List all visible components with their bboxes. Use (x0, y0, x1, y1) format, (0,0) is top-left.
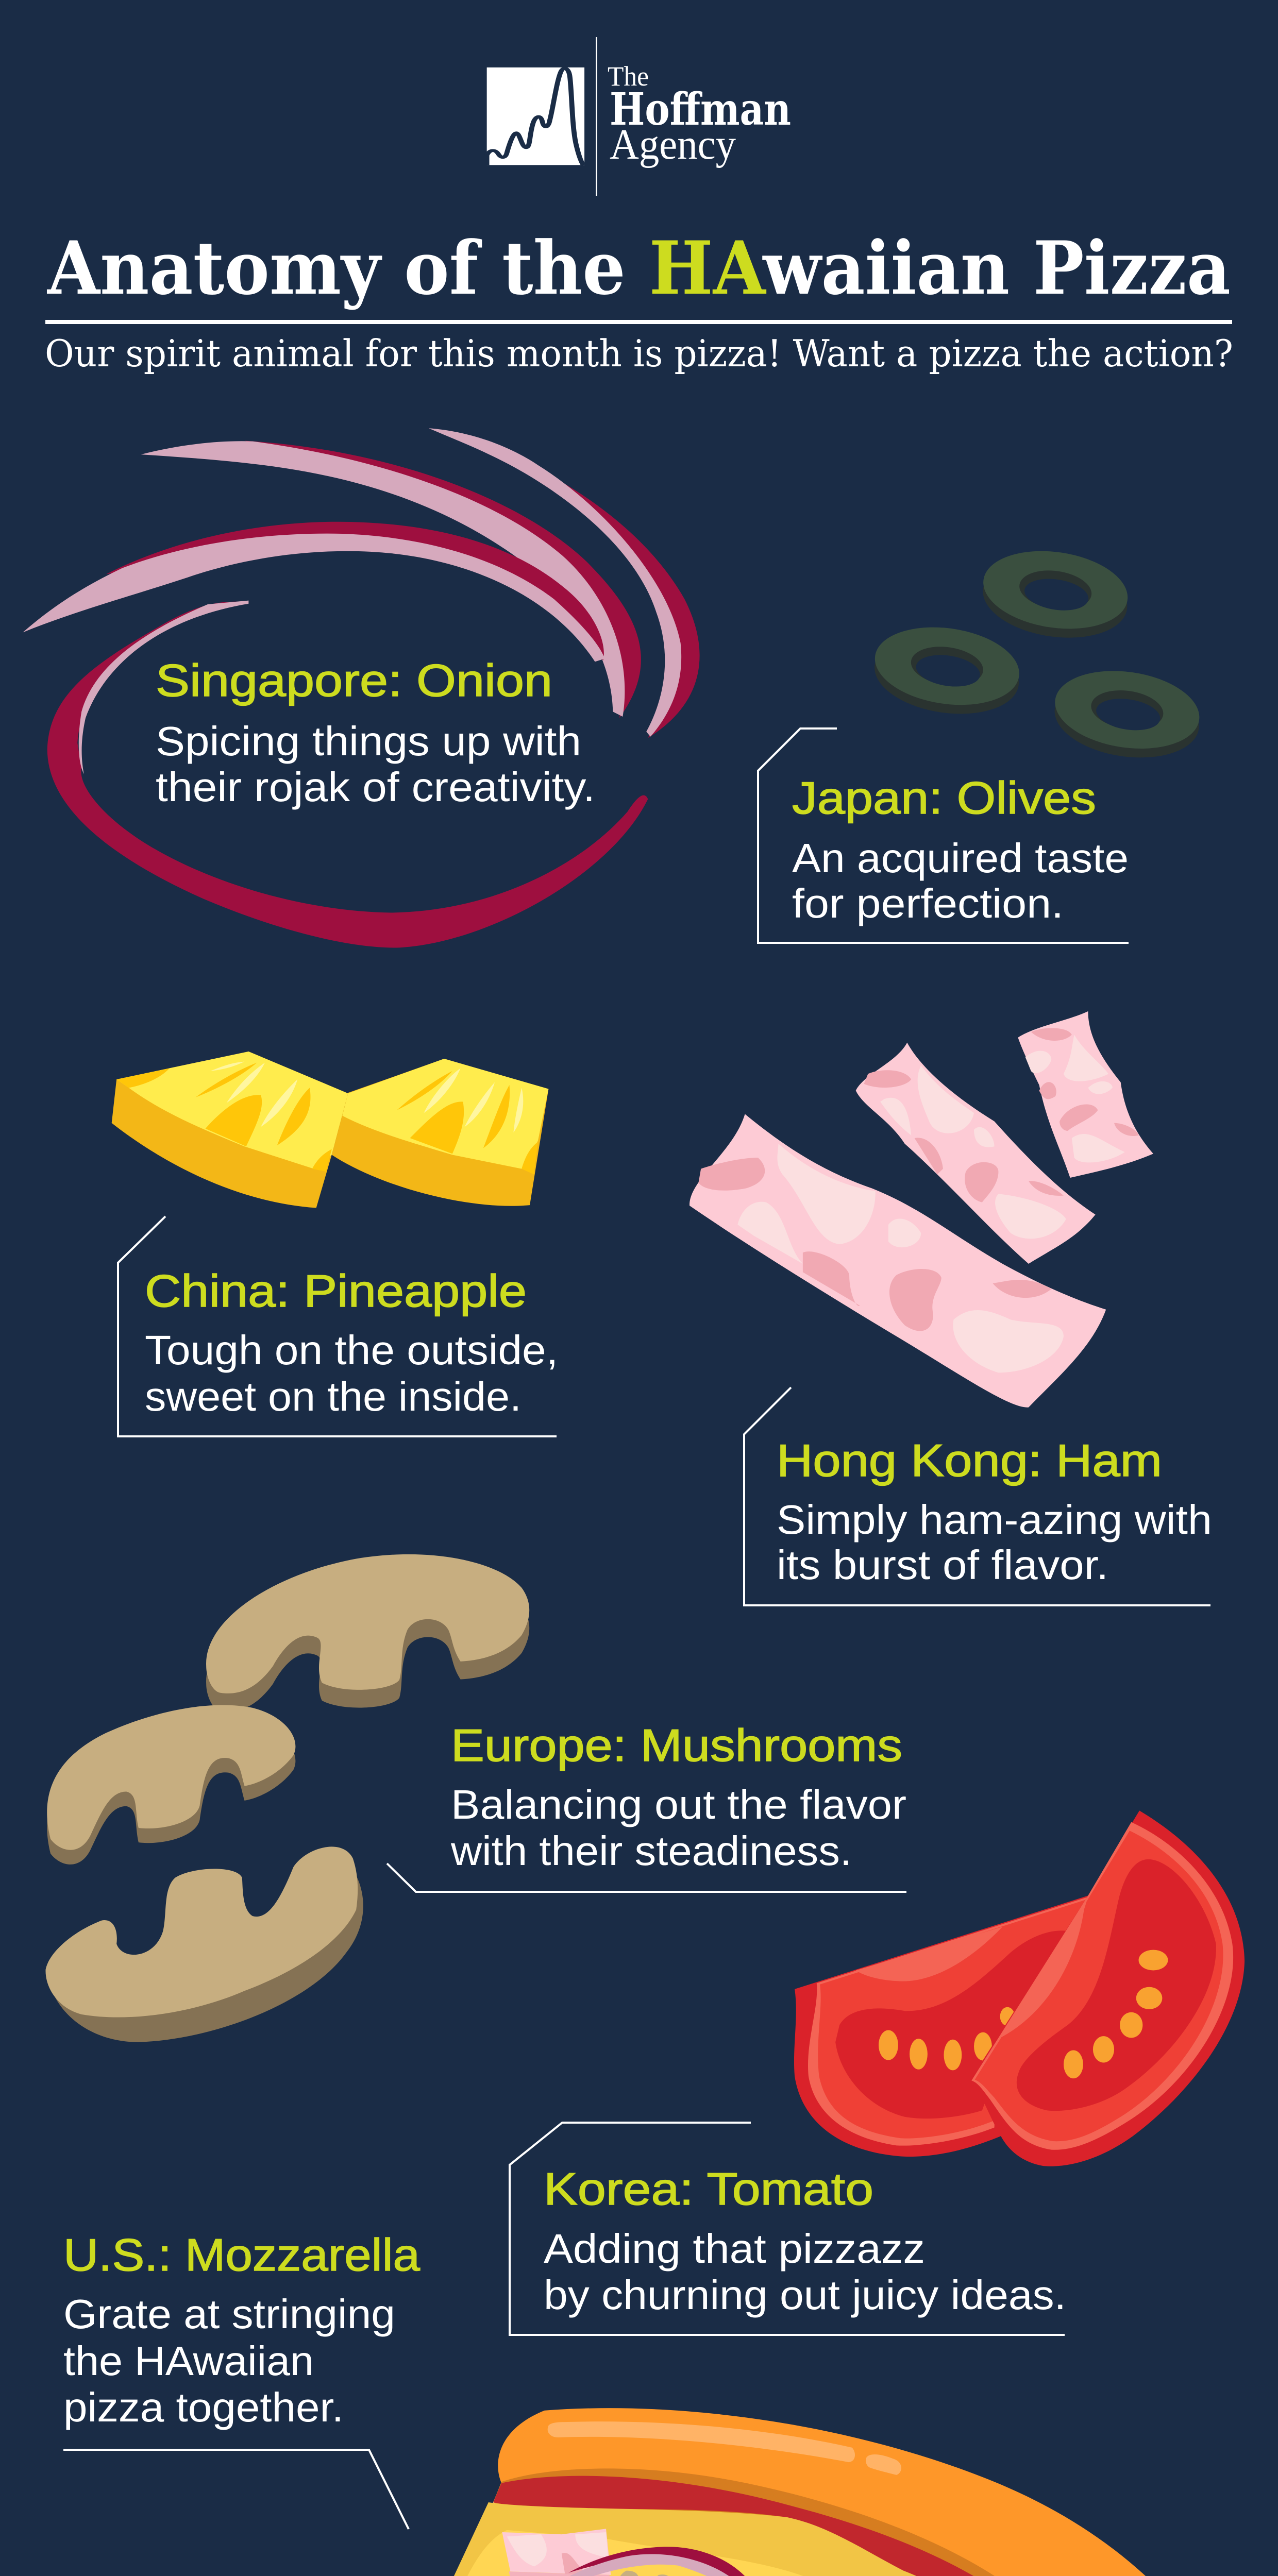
callout: Japan: An acquired taste (792, 835, 1129, 881)
callout: U.S.: the HAwaiian (63, 2338, 314, 2384)
callout: Europe: with their steadiness. (450, 1828, 852, 1874)
logo: The Hoffman Agency: Agency (610, 121, 736, 168)
callout: China: Tough on the outside, (145, 1327, 558, 1373)
illustration: main pizza slice (237, 2408, 1240, 2576)
callout: China (118, 1216, 558, 1436)
callout: U.S.: U.S.: Mozzarella (63, 2229, 420, 2280)
text block: Singapore: Spicing things up with (156, 718, 581, 764)
callout: China: sweet on the inside. (145, 1374, 522, 1419)
illustration: tomato slices (794, 1810, 1245, 2166)
callout: U.S. (63, 2229, 420, 2529)
callout: Europe: Balancing out the flavor (451, 1782, 906, 1827)
callout: U.S.: Grate at stringing (63, 2291, 395, 2337)
callout: Korea: Korea: Tomato (544, 2163, 873, 2214)
callout: Hong Kong: its burst of flavor. (777, 1542, 1108, 1588)
callout: Japan: Japan: Olives (792, 772, 1096, 823)
title: Anatomy of the HAwaiian Pizza (46, 226, 1231, 311)
callout: Hong Kong: Simply ham-azing with (777, 1497, 1212, 1543)
text block: Singapore: Singapore: Onion (156, 655, 552, 706)
logo: The Hoffman Agency: The (608, 61, 649, 92)
illustration: ham slices (690, 1011, 1153, 1408)
callout: U.S.: pizza together. (63, 2384, 344, 2430)
callout: China: China: Pineapple (145, 1265, 527, 1316)
text block: Singapore (156, 655, 595, 810)
logo: The Hoffman Agency (487, 37, 791, 196)
callout: Korea: Adding that pizzazz (544, 2226, 925, 2272)
callout: Europe (387, 1720, 906, 1892)
illustration: olives (861, 540, 1213, 769)
text block: Singapore: their rojak of creativity. (156, 764, 595, 810)
illustration: pineapple chunks (112, 1052, 548, 1208)
subtitle: Our spirit animal for this month is pizza! Want a pizza the action? (45, 332, 1233, 375)
callout: Korea: by churning out juicy ideas. (544, 2272, 1066, 2318)
toppings on main slice (350, 2529, 986, 2576)
melted cheese (237, 2502, 1086, 2576)
callout: Japan (758, 728, 1129, 943)
logo: The Hoffman Agency: Hoffman (610, 83, 791, 135)
callout: Japan: for perfection. (792, 880, 1064, 926)
callout: Hong Kong: Hong Kong: Ham (777, 1435, 1162, 1486)
illustration: onion rings (23, 428, 700, 947)
callout: Korea (510, 2123, 1066, 2335)
callout: Hong Kong (744, 1387, 1212, 1605)
pizza base and crust (257, 2408, 1240, 2576)
illustration: mushrooms (45, 1554, 529, 2042)
callout: Europe: Europe: Mushrooms (451, 1720, 902, 1771)
icon: logo chart mark (487, 67, 584, 165)
